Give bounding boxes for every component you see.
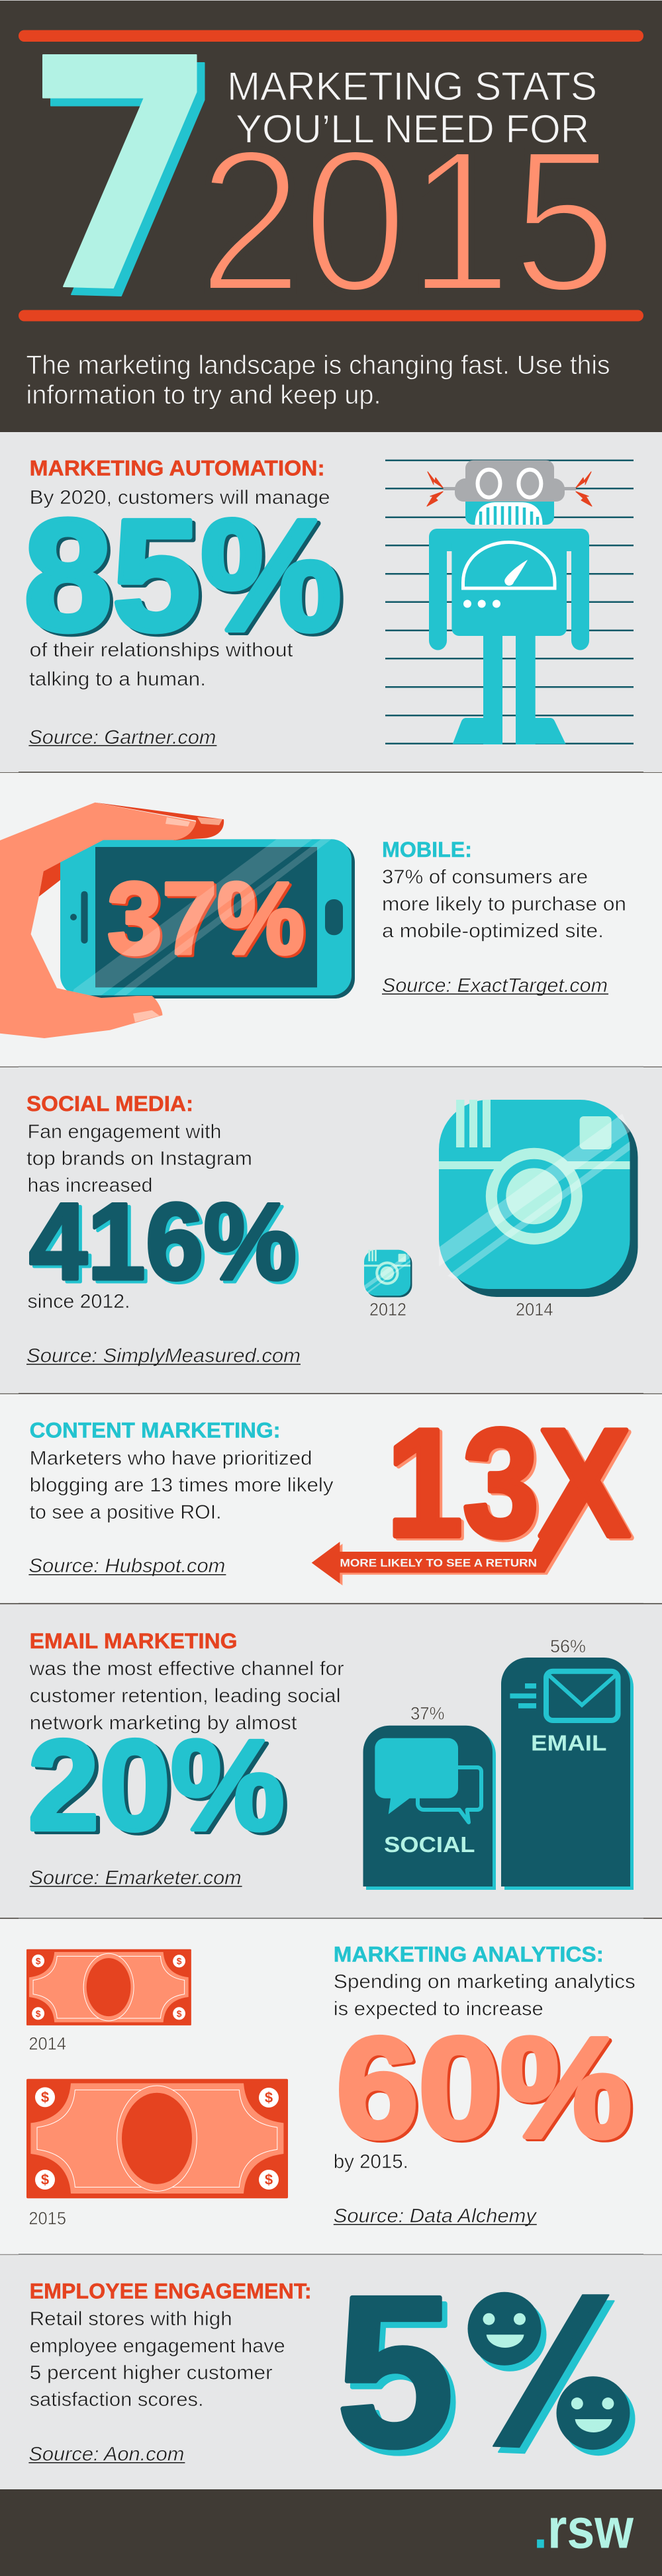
text block: By 2020, customers will manage <box>30 487 330 509</box>
text block: Marketers who have prioritized <box>30 1447 312 1469</box>
icon: dollar bill 2015 <box>26 2079 288 2198</box>
bar: email: EMAIL <box>531 1731 606 1755</box>
icon: dollar bill 2014: $ <box>36 2008 41 2019</box>
phone <box>60 839 355 999</box>
text block <box>26 1121 252 1196</box>
icon: dollar bill 2015: $ <box>41 2172 49 2188</box>
icon: large instagram camera <box>439 1100 638 1297</box>
icon: dollar bill 2015: $ <box>265 2172 273 2188</box>
stat 20%: 20% <box>28 1713 285 1857</box>
text block <box>334 1971 636 2020</box>
source: Source: Emarketer.com <box>30 1867 242 1888</box>
bar: email <box>501 1658 634 1890</box>
label 37%: 37% <box>410 1703 445 1723</box>
heading: SOCIAL MEDIA: <box>26 1092 193 1116</box>
text block: network marketing by almost <box>30 1712 297 1734</box>
illustration: robot <box>385 459 634 744</box>
text block: blogging are 13 times more likely <box>30 1474 334 1496</box>
title: YOU’LL NEED FOR <box>236 107 589 151</box>
stat 37%: 37% <box>110 863 307 977</box>
text block: to see a positive ROI. <box>30 1501 222 1523</box>
text block <box>382 866 626 942</box>
source: Source: Data Alchemy <box>334 2205 538 2227</box>
text block: Spending on marketing analytics <box>334 1971 636 1992</box>
arrow label: MORE LIKELY TO SEE A RETURN <box>340 1557 537 1570</box>
stat 13X with arrow: 13X <box>389 1399 633 1571</box>
face details <box>483 2313 614 2432</box>
stat 13X with arrow: 13X <box>387 1398 630 1569</box>
source: Source: SimplyMeasured.com <box>26 1345 301 1366</box>
source: Source: Hubspot.com <box>28 1555 225 1577</box>
panel: marketing analytics <box>0 1919 662 2255</box>
stat 85%: 85% <box>27 489 345 666</box>
label 2015: 2015 <box>28 2209 66 2229</box>
text block: 5 percent higher customer <box>30 2362 273 2384</box>
panel: employee engagement <box>0 2251 662 2497</box>
text block: by 2015. <box>334 2151 408 2173</box>
text block <box>30 2308 285 2411</box>
shadow layer: 5 <box>342 2257 459 2497</box>
text block: Fan engagement with <box>28 1121 221 1143</box>
header panel <box>0 0 662 432</box>
text block <box>29 1658 344 1734</box>
panel: content marketing <box>0 1394 662 1604</box>
icon: dollar bill 2014: $ <box>177 2008 182 2019</box>
stat 60%: 60% <box>336 2008 632 2167</box>
heading: CONTENT MARKETING: <box>30 1418 281 1442</box>
heading: EMAIL MARKETING <box>30 1629 238 1653</box>
text block: 37% of consumers are <box>382 866 588 888</box>
robot body <box>429 529 589 744</box>
icon: dollar bill 2014: $ <box>36 1955 41 1966</box>
main layer: 5 <box>336 2251 454 2491</box>
icon: dollar bill 2015: $ <box>41 2089 49 2106</box>
heading: EMPLOYEE ENGAGEMENT: <box>30 2279 312 2303</box>
text block: was the most effective channel for <box>29 1658 344 1680</box>
panel: email marketing <box>0 1604 662 1919</box>
stat 20%: 20% <box>32 1716 289 1860</box>
heading: MOBILE: <box>382 838 472 862</box>
text block: since 2012. <box>28 1291 130 1313</box>
text block <box>29 639 293 690</box>
title: MARKETING STATS <box>227 64 597 109</box>
text block: a mobile-optimized site. <box>382 920 604 942</box>
illustration: hand holding phone <box>0 803 355 1038</box>
robot head <box>444 461 576 525</box>
text block: top brands on Instagram <box>26 1148 252 1170</box>
shadow layer: % <box>464 2257 639 2497</box>
label 2014: 2014 <box>516 1300 553 1319</box>
label 56%: 56% <box>550 1636 586 1656</box>
text block: of their relationships without <box>30 639 293 661</box>
text block: satisfaction scores. <box>30 2389 204 2411</box>
stat 85%: 85% <box>24 486 342 664</box>
panel: marketing automation <box>0 432 662 773</box>
icon: dollar bill 2014 <box>26 1949 191 2025</box>
stat 416%: 416% <box>32 1183 300 1305</box>
intro text: information to try and keep up. <box>26 380 381 410</box>
bar: social <box>363 1726 496 1890</box>
source: Source: ExactTarget.com <box>382 975 608 997</box>
lightning bolts <box>427 472 592 506</box>
text block: Retail stores with high <box>30 2308 232 2330</box>
text block: has increased <box>28 1175 152 1196</box>
heading: MARKETING AUTOMATION: <box>30 456 325 480</box>
text block <box>30 1447 334 1523</box>
hand <box>0 803 224 1038</box>
stat 416%: 416% <box>29 1180 297 1302</box>
source: Source: Aon.com <box>28 2443 184 2465</box>
panel: mobile <box>0 773 662 1067</box>
gauge <box>463 543 555 607</box>
title <box>227 64 597 151</box>
intro text <box>26 351 610 410</box>
text block: employee engagement have <box>30 2335 285 2357</box>
heading: MARKETING ANALYTICS: <box>334 1942 604 1966</box>
panel: social media <box>0 1067 662 1394</box>
stat 37%: 37% <box>107 861 305 975</box>
source: Source: Gartner.com <box>28 727 216 748</box>
main layer <box>340 2292 630 2450</box>
intro text: The marketing landscape is changing fast. Use this <box>26 351 610 380</box>
shadow layer <box>350 2300 636 2456</box>
text block: talking to a human. <box>29 668 206 690</box>
icon: dollar bill 2014: $ <box>177 1956 182 1967</box>
text block: customer retention, leading social <box>30 1685 341 1707</box>
text block: is expected to increase <box>334 1998 544 2020</box>
main layer: % <box>459 2251 634 2491</box>
label 2012: 2012 <box>369 1300 406 1319</box>
year 2015: 2015 <box>198 107 617 335</box>
big number 7 <box>43 55 204 296</box>
stat 5% with smiley faces <box>340 2292 636 2456</box>
bar: social: SOCIAL <box>384 1832 475 1857</box>
footer <box>0 2489 662 2576</box>
icon: small instagram camera <box>364 1250 412 1298</box>
logo: .rsw <box>534 2498 634 2561</box>
stat 13X with arrow <box>312 1398 633 1585</box>
icon: dollar bill 2015: $ <box>265 2090 273 2106</box>
stat 60%: 60% <box>339 2010 634 2169</box>
label 2014: 2014 <box>28 2033 66 2053</box>
text block: more likely to purchase on <box>382 893 626 915</box>
